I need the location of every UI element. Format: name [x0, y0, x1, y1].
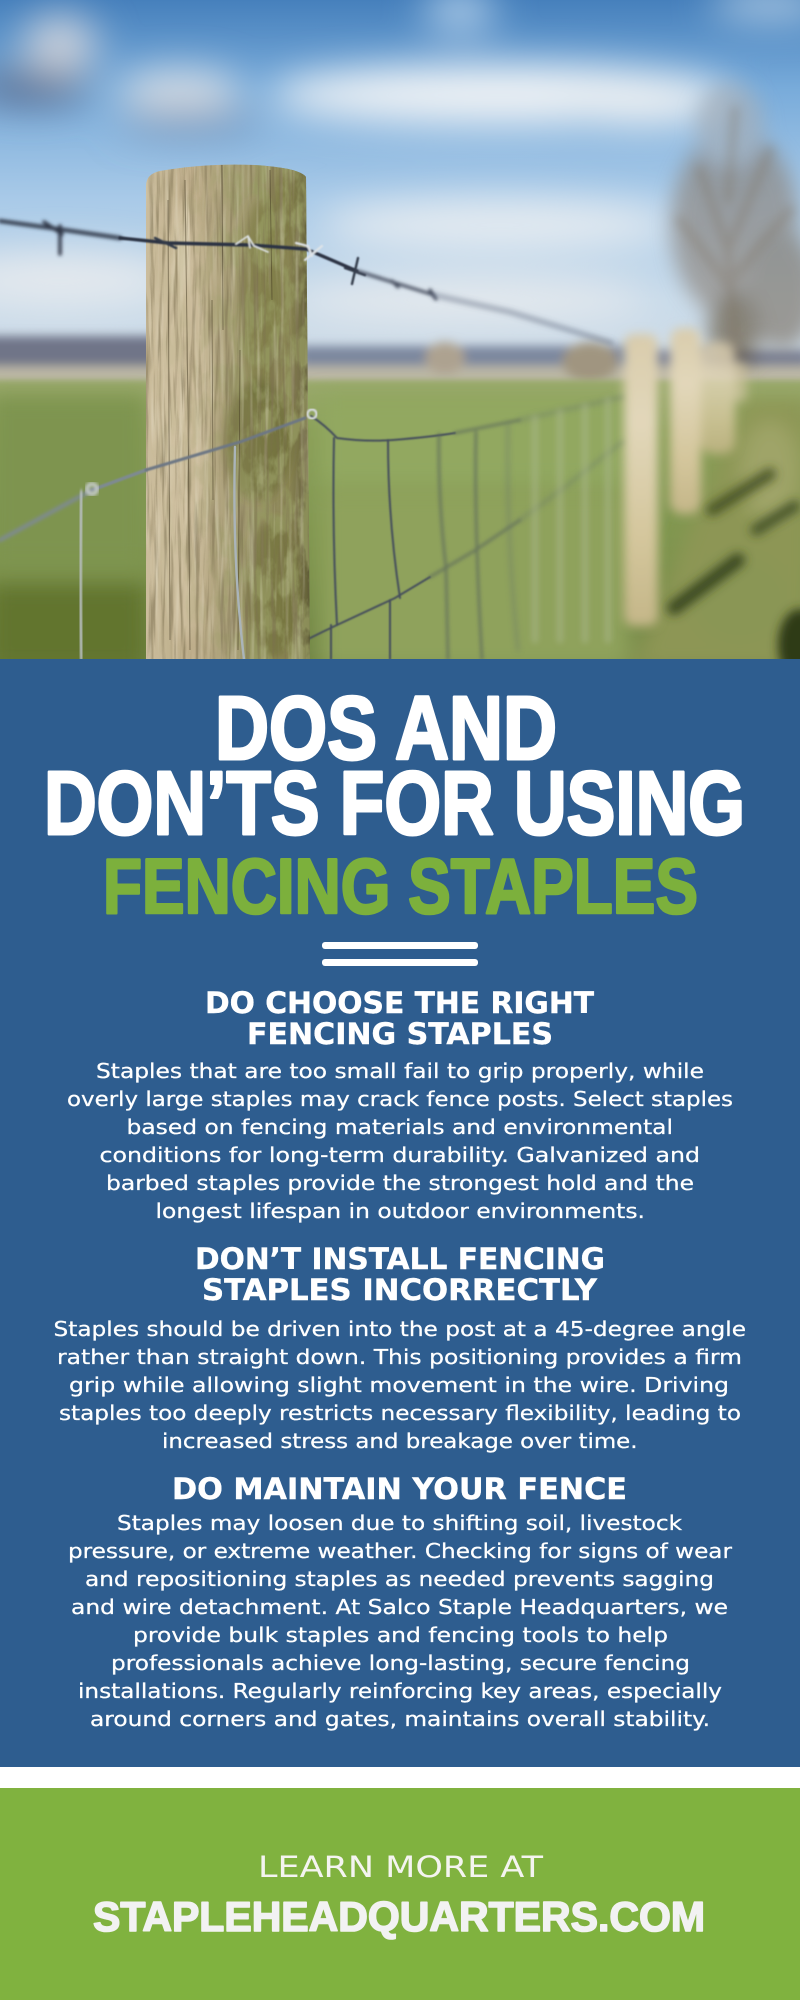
body text: do choose	[67, 1059, 733, 1223]
heading: don't install: STAPLES INCORRECTLY	[202, 1273, 598, 1307]
title: DOS AND	[215, 679, 557, 779]
distant hills	[0, 336, 800, 390]
body text: do maintain: pressure, or extreme weather. Checking for signs of wear	[68, 1539, 733, 1563]
call to action label: LEARN MORE AT	[258, 1850, 543, 1884]
body text: do maintain: provide bulk staples and fencing tools to help	[133, 1623, 668, 1647]
section: don't install fencing staples incorrectly	[54, 1242, 746, 1453]
heading: do choose: DO CHOOSE THE RIGHT	[205, 986, 594, 1020]
galvanized wire wrapping the post	[0, 410, 316, 659]
post shadows on the ground	[674, 474, 795, 608]
body text: do choose: conditions for long-term durability. Galvanized and	[100, 1143, 700, 1167]
far fence posts	[624, 328, 747, 626]
panel: blue article background	[0, 659, 800, 1767]
body text: do maintain: around corners and gates, maintains overall stability.	[90, 1707, 710, 1731]
body text: don't install: Staples should be driven into the post at a 45-degree angle	[54, 1317, 746, 1341]
heading: do maintain: DO MAINTAIN YOUR FENCE	[172, 1472, 627, 1506]
section: do maintain your fence	[68, 1472, 733, 1731]
body text: don't install: increased stress and breakage over time.	[162, 1429, 638, 1453]
body text: do maintain: and wire detachment. At Salco Staple Headquarters, we	[71, 1595, 728, 1619]
wire mesh fence	[310, 395, 624, 659]
heading: don't install: DON’T INSTALL FENCING	[195, 1242, 605, 1276]
body text: do choose: based on fencing materials and environmental	[126, 1115, 673, 1139]
divider: double white bars	[322, 942, 478, 966]
panel: green call to action	[0, 1788, 800, 2000]
body text: do choose: barbed staples provide the strongest hold and the	[106, 1171, 694, 1195]
heading: do choose	[205, 986, 594, 1051]
body text: don't install	[54, 1317, 746, 1453]
body text: do maintain: Staples may loosen due to shifting soil, livestock	[117, 1511, 682, 1535]
body text: do choose: longest lifespan in outdoor environments.	[156, 1199, 645, 1223]
body text: do choose: overly large staples may crack fence posts. Select staples	[67, 1087, 733, 1111]
section: do choose the right fencing staples	[67, 986, 733, 1223]
heading: do choose: FENCING STAPLES	[247, 1017, 553, 1051]
body text: don't install: staples too deeply restricts necessary flexibility, leading to	[59, 1401, 741, 1425]
body text: do maintain: installations. Regularly reinforcing key areas, especially	[78, 1679, 722, 1703]
hero photo: fence post in a field	[0, 0, 800, 681]
body text: do maintain: professionals achieve long-lasting, secure fencing	[111, 1651, 690, 1675]
field	[0, 380, 800, 670]
distant tree	[671, 83, 800, 370]
main wooden post	[140, 160, 316, 660]
title	[44, 679, 745, 930]
body text: don't install: grip while allowing slight movement in the wire. Driving	[69, 1373, 729, 1397]
body text: do maintain: and repositioning staples as needed prevents sagging	[85, 1567, 714, 1591]
website address: STAPLEHEADQUARTERS.COM	[93, 1893, 705, 1940]
body text: don't install: rather than straight down. This positioning provides a firm	[57, 1345, 742, 1369]
body text: do maintain	[68, 1511, 733, 1731]
body text: do choose: Staples that are too small fail to grip properly, while	[96, 1059, 704, 1083]
heading: don't install	[195, 1242, 605, 1307]
barbed wire	[0, 221, 612, 343]
